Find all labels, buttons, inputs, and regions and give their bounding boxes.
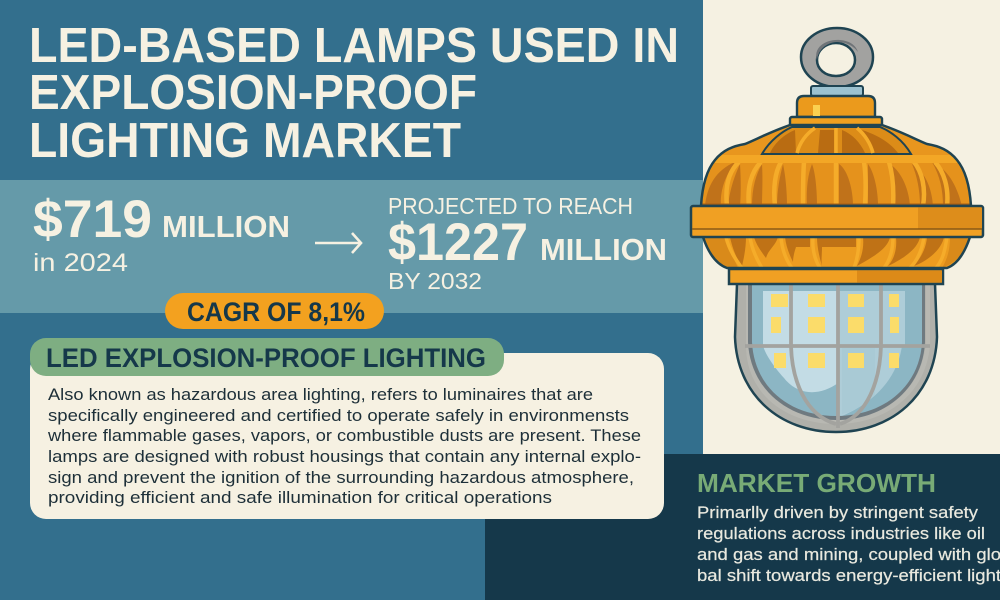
stat: 2024 market value: in 2024	[33, 249, 128, 277]
lamp: upper housing	[700, 125, 972, 206]
definition text: providing efficient and safe illumination for critical operations	[48, 488, 552, 507]
lamp: bottom ring	[729, 269, 943, 284]
market growth body: regulations across industries like oil	[697, 525, 985, 543]
title	[29, 19, 679, 168]
stat: 2032 projection: BY 2032	[388, 268, 482, 294]
definition text: Also known as hazardous area lighting, refers to luminaires that are	[48, 385, 593, 404]
market growth body: bal shift towards energy-efficient light	[697, 567, 1000, 585]
stat: 2032 projection	[388, 193, 667, 294]
stat: 2032 projection: MILLION	[540, 232, 667, 267]
market growth body: Primarlly driven by stringent safety	[697, 504, 979, 522]
definition text: where flammable gases, vapors, or combustible dusts are present. These	[47, 426, 641, 445]
title: LIGHTING MARKET	[29, 114, 461, 168]
stat: 2024 market value: $719	[33, 190, 152, 249]
panel: lamp backdrop	[703, 0, 1000, 454]
lamp: top cap	[790, 96, 882, 127]
market growth body	[697, 504, 1000, 585]
market growth body: and gas and mining, coupled with glo	[697, 546, 1000, 564]
panel: definition card	[30, 338, 664, 519]
panel: market value band	[0, 180, 703, 313]
definition text: sign and prevent the ignition of the surrounding hazardous atmosphere,	[48, 468, 634, 487]
lamp: collar	[811, 86, 863, 96]
stat: 2032 projection: $1227	[388, 213, 528, 272]
panel: market growth background	[485, 454, 1000, 600]
stat: 2032 projection: PROJECTED TO REACH	[388, 193, 633, 219]
definition text: specifically engineered and certified to operate safely in environmensts	[48, 406, 629, 425]
CAGR badge: CAGR OF 8,1%	[187, 297, 365, 327]
lamp: glass globe with cage	[735, 284, 937, 432]
stat: 2024 market value: MILLION	[162, 209, 290, 244]
market growth heading: MARKET GROWTH	[697, 468, 936, 498]
definition text: lamps are designed with robust housings that contain any internal explo-	[48, 447, 641, 466]
arrow	[315, 233, 361, 253]
title: EXPLOSION-PROOF	[29, 66, 477, 120]
lamp: hanging ring	[801, 28, 873, 87]
market growth text	[697, 468, 1000, 585]
stat: 2024 market value	[33, 190, 290, 277]
icon: explosion-proof lamp	[691, 28, 983, 432]
definition heading: LED EXPLOSION-PROOF LIGHTING	[46, 343, 486, 373]
lamp: LED chips	[771, 294, 899, 368]
lamp: wide flange	[691, 206, 983, 237]
title: LED-BASED LAMPS USED IN	[29, 19, 679, 73]
lamp: lower housing	[700, 237, 970, 268]
definition text	[47, 385, 641, 507]
